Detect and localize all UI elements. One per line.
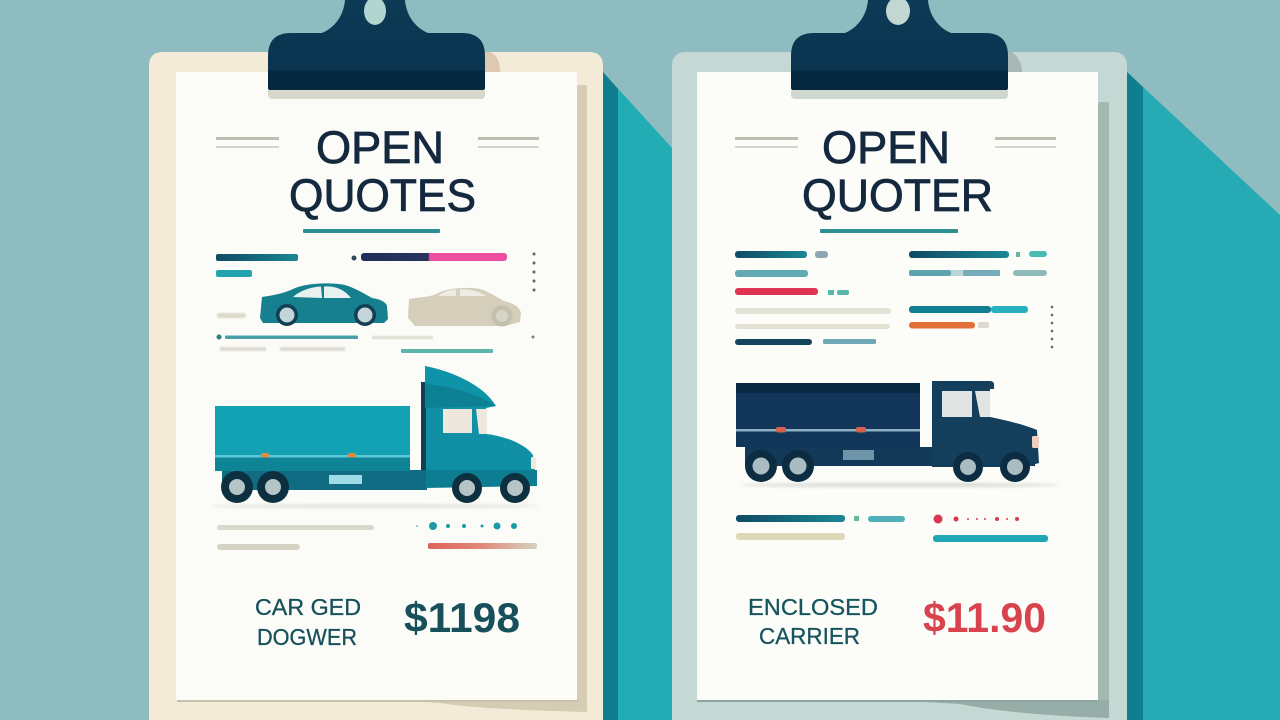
paper shadow [177,85,587,712]
price: $11.90 [923,594,1046,641]
price: $1198 [404,594,520,641]
paper sheet [176,72,577,700]
clip side shadow [1006,52,1022,72]
icon: teal car [260,283,388,326]
title underline [820,229,958,233]
heading rules right [735,137,1056,148]
carrier label: DOGWER [257,624,357,650]
clip [268,0,485,99]
title: QUOTES [289,170,476,221]
clip [791,0,1008,99]
title: QUOTER [802,170,993,221]
clipboard board [672,52,1127,720]
quote lines bottom [736,514,1048,542]
carrier label [255,594,361,650]
title: OPEN [822,122,950,173]
paper shadow [697,102,1109,718]
teal shadow behind right clipboard [1127,72,1280,720]
panel: left clipboard [149,0,603,720]
quote lines bottom [217,522,537,550]
quote lines left column [735,251,891,345]
title underline [303,229,440,233]
quote lines middle [216,313,534,353]
icon: navy truck [736,381,1060,487]
carrier label: CAR GED [255,594,361,620]
carrier label [748,594,878,649]
heading rules left [216,137,539,148]
clipboard board [149,52,603,720]
clip side shadow [484,52,500,72]
carrier label: ENCLOSED [748,594,878,620]
icon: beige car [408,288,521,326]
carrier label: CARRIER [759,623,860,649]
panel: right clipboard [672,0,1127,720]
quote lines right column [909,251,1053,348]
title [289,122,476,221]
teal shadow behind left clipboard [603,72,672,720]
paper sheet [697,72,1098,700]
quote lines top [216,252,536,292]
icon: teal truck [210,366,540,508]
title: OPEN [316,122,444,173]
title [802,122,993,221]
